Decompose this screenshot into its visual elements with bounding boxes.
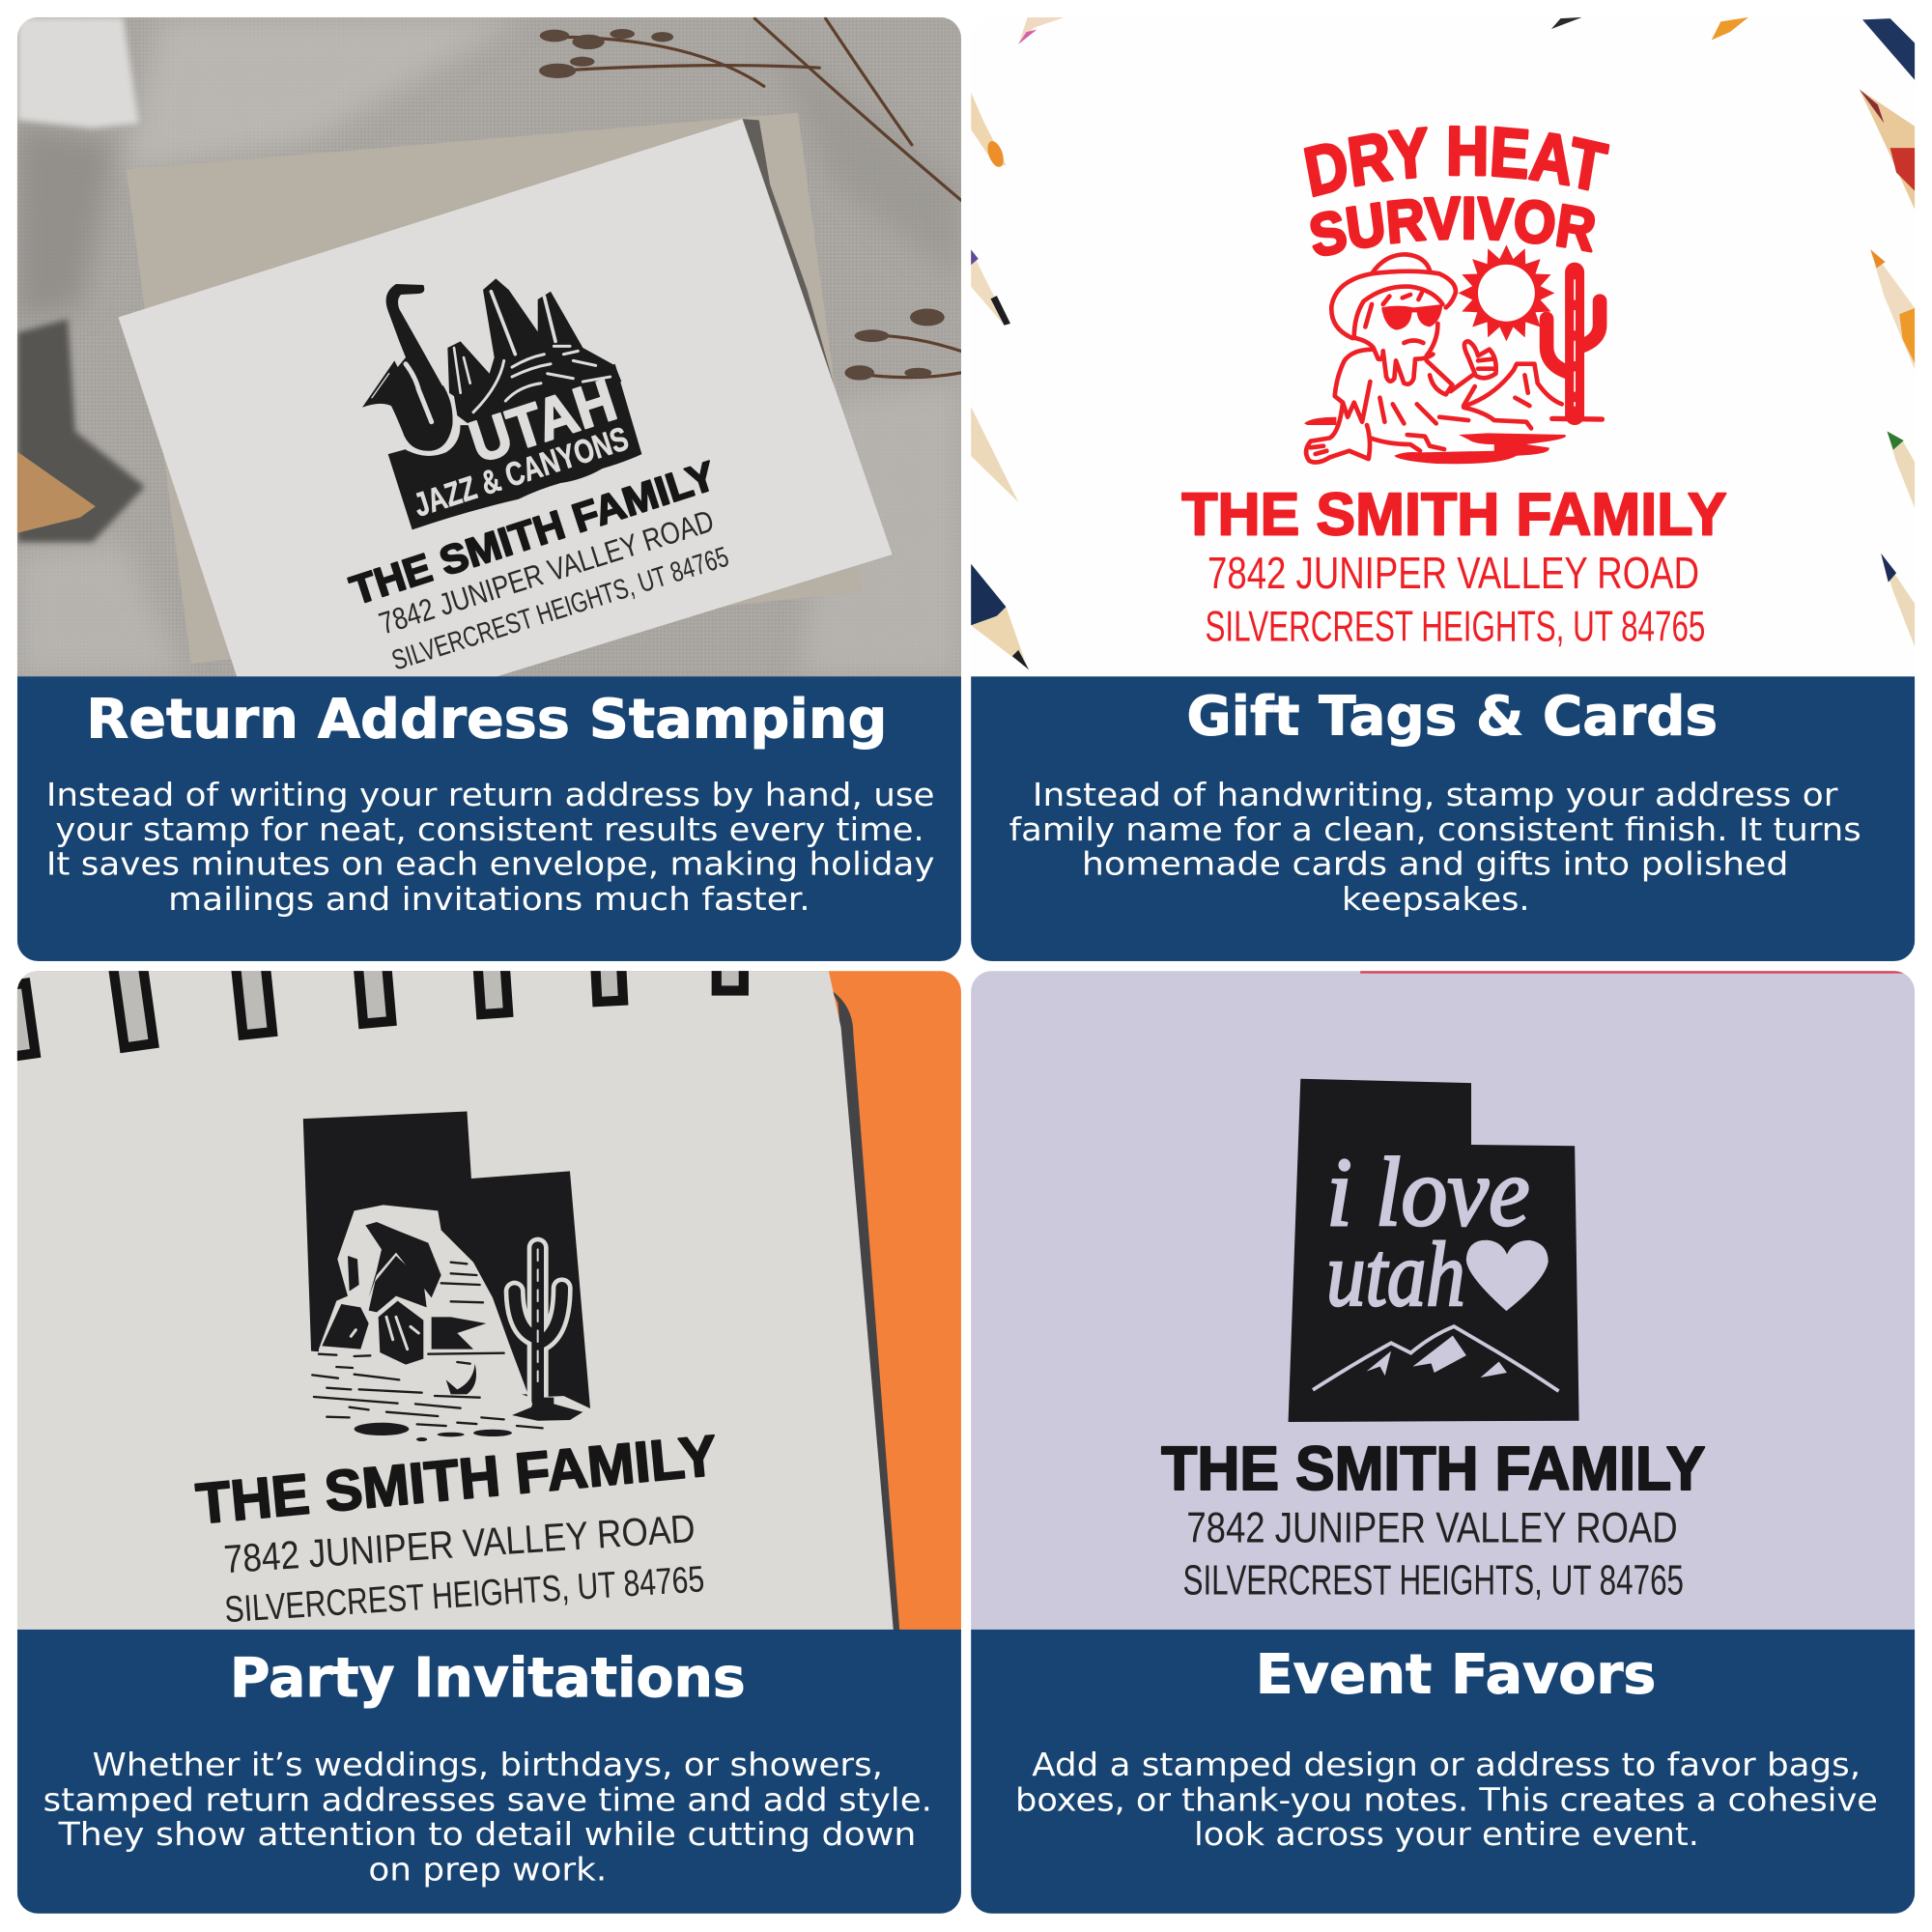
city line: SILVERCREST HEIGHTS, UT 84765 xyxy=(223,1558,705,1631)
panel: gift tags and cards xyxy=(956,17,1915,983)
utah wordmark: UTAH xyxy=(462,367,624,475)
shadow of wooden block xyxy=(17,319,145,542)
family name: THE SMITH FAMILY xyxy=(1161,1434,1705,1503)
arch illustration xyxy=(312,1205,582,1441)
photo: spiral notepad on orange paper xyxy=(0,961,961,1632)
arched slogan line one: DRY HEAT xyxy=(1304,126,1609,197)
description: It saves minutes on each envelope, making holiday xyxy=(46,845,935,883)
saguaro cactus xyxy=(515,1248,562,1401)
stamp artwork: utah jazz and canyons xyxy=(345,278,732,677)
delicate arch xyxy=(319,1205,528,1394)
description xyxy=(1015,1746,1878,1853)
fabric ribbon xyxy=(17,17,139,128)
melting man line art xyxy=(1306,254,1562,463)
description xyxy=(46,776,935,918)
sunglasses xyxy=(1381,304,1442,330)
arch shadows xyxy=(322,1222,486,1365)
photo: white paper with coloured pencils xyxy=(971,17,1915,678)
melting man, sun and cactus illustration xyxy=(1304,244,1602,464)
script line: utah: utah xyxy=(1326,1223,1465,1325)
description: stamped return addresses save time and add style. xyxy=(43,1780,932,1818)
cactus xyxy=(1547,272,1602,419)
arched slogan line two: SURVIVOR xyxy=(1310,195,1596,257)
street address: 7842 JUNIPER VALLEY ROAD xyxy=(1186,1504,1678,1551)
icon: mountains xyxy=(1313,1326,1559,1391)
panel: party invitations xyxy=(0,961,961,1914)
description: Instead of handwriting, stamp your address or xyxy=(1033,776,1838,813)
description xyxy=(1009,776,1861,918)
puddle xyxy=(1304,417,1566,464)
canyon spires xyxy=(447,278,621,425)
stamp artwork: i love utah xyxy=(1161,1079,1705,1605)
envelope xyxy=(127,113,863,664)
heading: Return Address Stamping xyxy=(86,688,887,751)
notepad page xyxy=(17,971,894,1631)
saxophone highlights xyxy=(372,314,459,455)
description: family name for a clean, consistent finish. It turns xyxy=(1009,810,1861,848)
description: Add a stamped design or address to favor bags, xyxy=(1032,1746,1861,1783)
wooden block xyxy=(17,452,96,533)
heading: Party Invitations xyxy=(230,1647,746,1710)
dried twigs xyxy=(554,18,961,378)
heading: Event Favors xyxy=(1256,1644,1656,1707)
description: keepsakes. xyxy=(1342,880,1530,918)
family name: THE SMITH FAMILY xyxy=(1181,481,1727,549)
notepad back edge xyxy=(832,991,899,1631)
description xyxy=(43,1746,932,1888)
caption band xyxy=(17,676,961,961)
stamp artwork: utah arch and cactus xyxy=(193,1112,720,1631)
card shadow edge xyxy=(742,119,835,388)
spiral rings xyxy=(0,961,744,1058)
description: on prep work. xyxy=(368,1850,607,1888)
city line: SILVERCREST HEIGHTS, UT 84765 xyxy=(388,541,732,677)
panel: event favors xyxy=(971,971,1915,1914)
utah state silhouette xyxy=(303,1112,590,1408)
caption band xyxy=(17,1630,961,1914)
logo shapes xyxy=(362,278,641,529)
canyon highlights xyxy=(454,292,611,412)
top edge pencil tips xyxy=(1018,17,1748,44)
script line: i love: i love xyxy=(1326,1138,1530,1247)
right edge pencils xyxy=(1860,18,1915,647)
family name: THE SMITH FAMILY xyxy=(193,1423,720,1536)
street address: 7842 JUNIPER VALLEY ROAD xyxy=(375,503,718,641)
street address: 7842 JUNIPER VALLEY ROAD xyxy=(222,1506,696,1581)
fabric folds xyxy=(17,17,961,676)
description: homemade cards and gifts into polished xyxy=(1082,845,1788,883)
utah state silhouette xyxy=(1289,1079,1579,1422)
panel: return address stamping xyxy=(17,17,961,961)
saxophone xyxy=(362,284,453,451)
street address: 7842 JUNIPER VALLEY ROAD xyxy=(1208,548,1699,598)
description: Whether it’s weddings, birthdays, or showers, xyxy=(93,1746,883,1783)
heading: Gift Tags & Cards xyxy=(1186,685,1718,748)
jazz and canyons wordmark: JAZZ & CANYONS xyxy=(410,420,633,525)
family name: THE SMITH FAMILY xyxy=(345,452,721,613)
caption band xyxy=(971,1630,1915,1914)
description: Instead of writing your return address by hand, use xyxy=(46,776,935,813)
city line: SILVERCREST HEIGHTS, UT 84765 xyxy=(1183,1558,1684,1605)
city line: SILVERCREST HEIGHTS, UT 84765 xyxy=(1205,603,1705,650)
description: your stamp for neat, consistent results every time. xyxy=(55,810,924,848)
cactus base xyxy=(512,1398,582,1421)
strata and ground lines xyxy=(312,1263,543,1428)
stamp artwork: dry heat survivor xyxy=(1181,126,1727,647)
ground stones and shrub xyxy=(355,1364,512,1441)
seed pods xyxy=(539,29,945,381)
photo: lilac paper xyxy=(971,971,1915,1632)
description: look across your entire event. xyxy=(1194,1815,1699,1853)
sun xyxy=(1458,244,1554,341)
description: boxes, or thank-you notes. This creates a cohesive xyxy=(1015,1780,1878,1818)
arch details xyxy=(351,1317,418,1350)
description: mailings and invitations much faster. xyxy=(168,880,810,918)
description: They show attention to detail while cutting down xyxy=(57,1815,916,1853)
caption band xyxy=(971,676,1915,961)
banner xyxy=(388,364,641,529)
icon: heart xyxy=(1466,1240,1548,1311)
left edge pencils xyxy=(971,93,1029,669)
white card xyxy=(118,119,893,678)
photo: card on linen with envelope xyxy=(17,17,961,678)
